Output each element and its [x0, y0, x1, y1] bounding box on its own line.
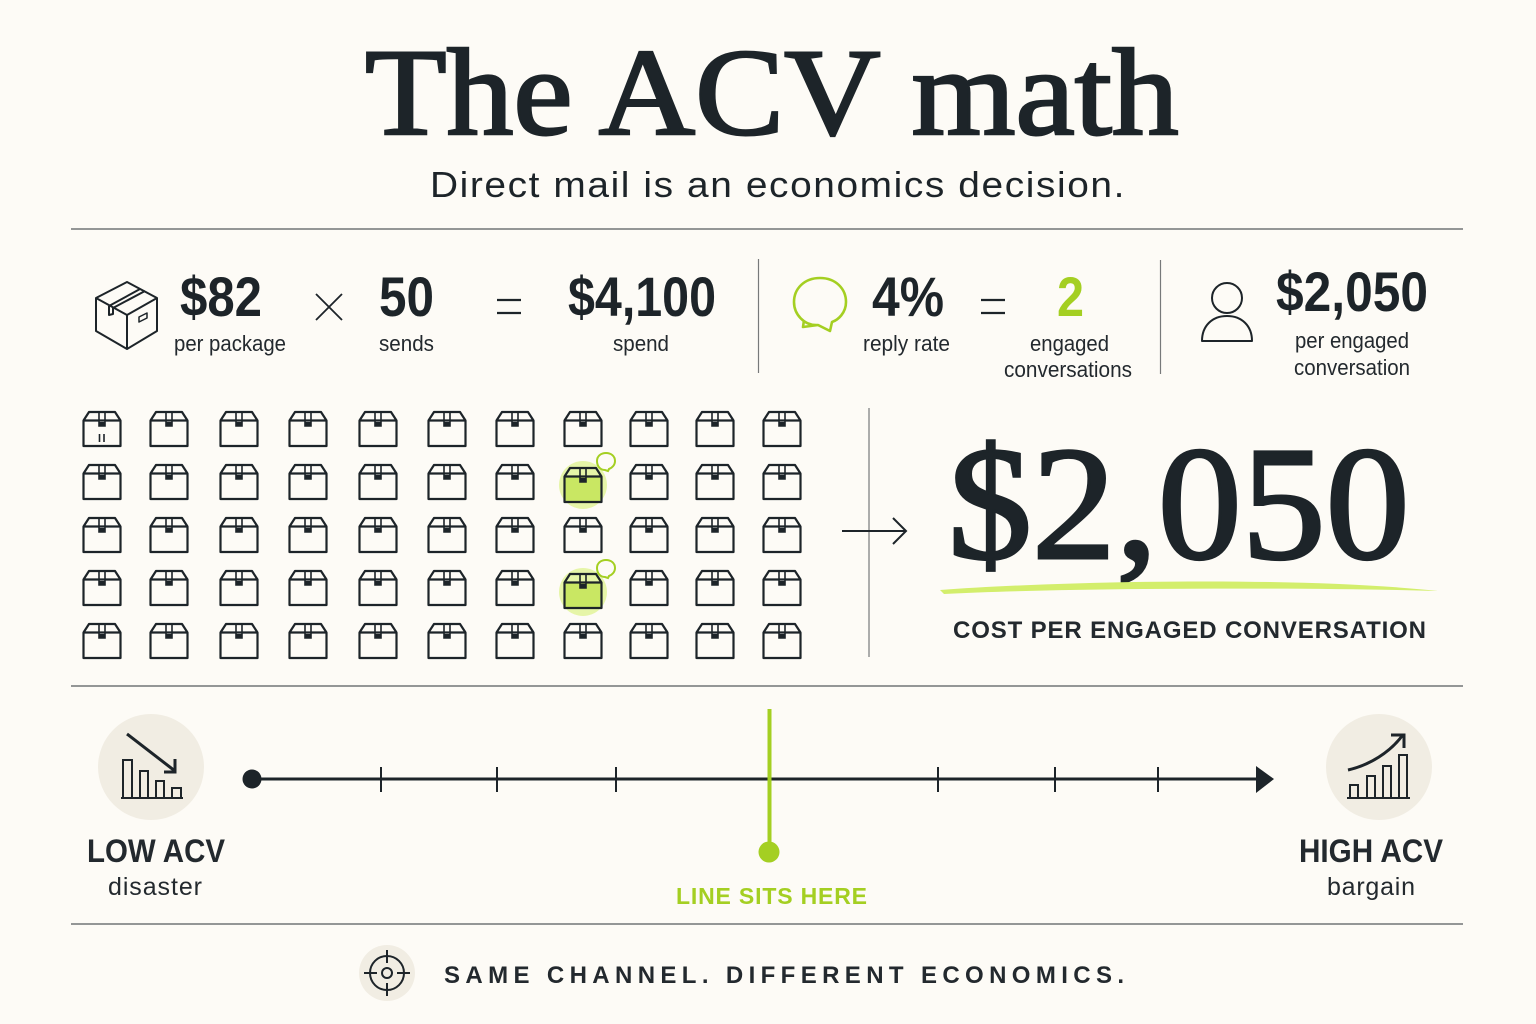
stat: reply rate — [863, 265, 950, 356]
icon: rising bars — [1326, 714, 1432, 820]
stat: spend: $4,100 — [568, 265, 716, 328]
low ACV label: disaster — [108, 873, 202, 901]
stat: sends: sends — [379, 331, 434, 356]
icon: person — [1202, 283, 1252, 341]
icon: package — [96, 282, 157, 349]
high ACV label: HIGH ACV — [1299, 833, 1444, 869]
stat: cost per engaged conversation — [1276, 260, 1428, 380]
stat: engaged conversations: 2 — [1057, 265, 1084, 328]
marker: line sits here: LINE SITS HERE — [676, 883, 867, 909]
stat: spend — [568, 265, 716, 356]
highlighted package with reply bubble — [559, 453, 615, 509]
highlighted package with reply bubble — [559, 560, 615, 616]
stat: price per package: per package — [174, 331, 286, 356]
operator: equals — [497, 300, 521, 313]
operator: times — [316, 294, 342, 320]
stat: price per package: $82 — [180, 265, 262, 328]
operator: equals — [981, 300, 1005, 313]
title: The ACV math — [365, 23, 1179, 161]
chart: grid of 55 packages with 2 highlighted — [84, 412, 800, 658]
stat: sends: 50 — [379, 265, 434, 328]
scale axis — [242, 766, 1274, 793]
stat: engaged conversations: conversations — [1004, 357, 1132, 382]
icon: target — [359, 945, 415, 1001]
big result figure — [940, 414, 1438, 644]
low ACV label: LOW ACV — [87, 833, 226, 869]
footer tagline: SAME CHANNEL. DIFFERENT ECONOMICS. — [444, 962, 1124, 989]
big number: $2,050 — [948, 414, 1410, 593]
subtitle: Direct mail is an economics decision. — [430, 164, 1124, 205]
stat: reply rate: reply rate — [863, 331, 950, 356]
stat: spend: spend — [613, 331, 669, 356]
arrow — [842, 518, 906, 544]
icon: speech bubble — [794, 278, 846, 331]
result caption: COST PER ENGAGED CONVERSATION — [953, 617, 1426, 644]
stat: cost per engaged conversation: conversation — [1294, 355, 1410, 380]
high ACV label: bargain — [1327, 873, 1415, 901]
marker: line sits here — [676, 709, 867, 909]
low ACV label — [87, 833, 226, 901]
stat: engaged conversations: engaged — [1030, 331, 1109, 356]
stat: engaged conversations — [1004, 265, 1132, 382]
panel: equation row — [96, 259, 1428, 382]
stat: cost per engaged conversation: $2,050 — [1276, 260, 1428, 323]
stat: reply rate: 4% — [872, 265, 944, 328]
high ACV label — [1299, 833, 1444, 901]
panel: ACV scale — [87, 709, 1444, 909]
icon: falling bars — [98, 714, 204, 820]
stat: price per package — [174, 265, 286, 356]
stat: sends — [379, 265, 434, 356]
stat: cost per engaged conversation: per engaged — [1295, 328, 1409, 353]
highlight underline — [940, 581, 1438, 594]
